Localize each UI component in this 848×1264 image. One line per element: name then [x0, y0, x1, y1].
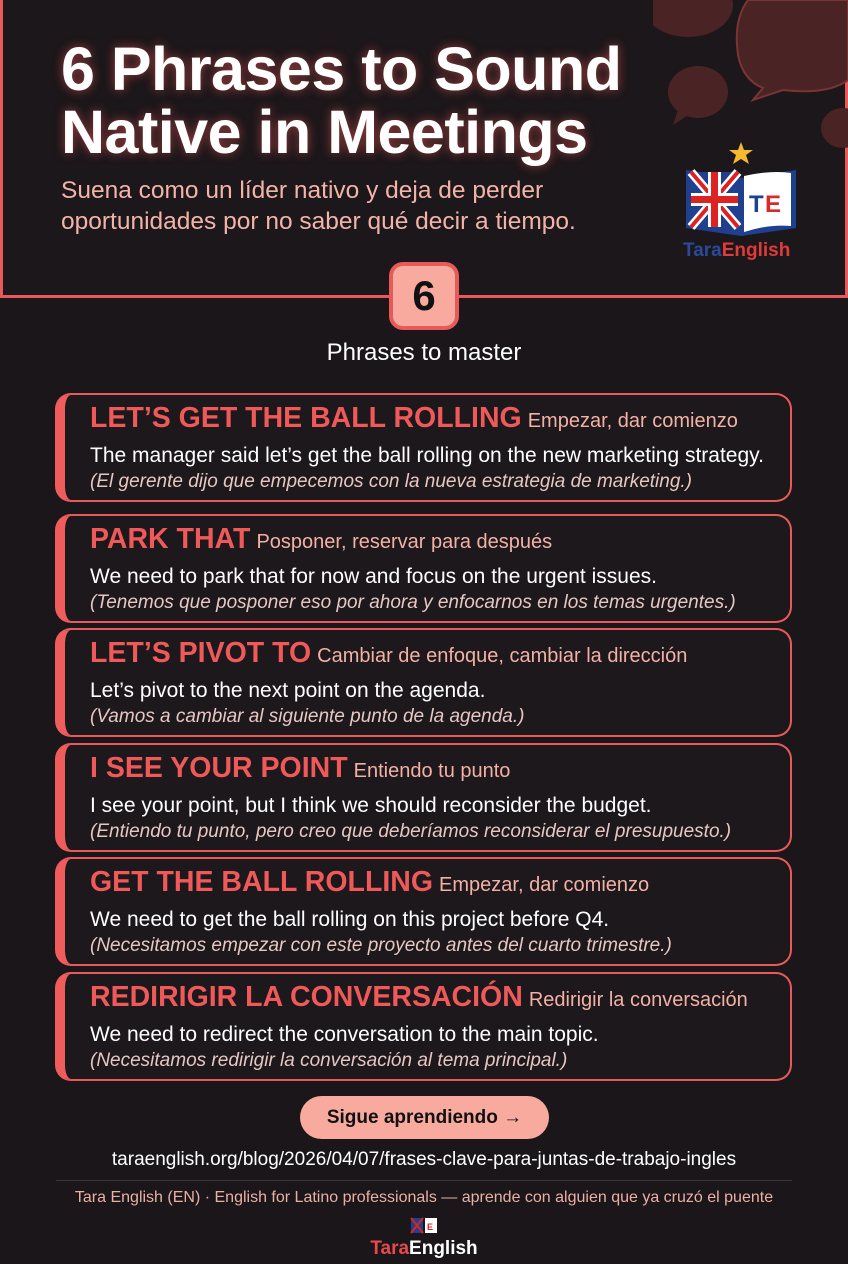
card 5: We need to get the ball rolling on this project before Q4. [90, 908, 609, 931]
card 5: (Necesitamos empezar con este proyecto antes del cuarto trimestre.) [90, 935, 672, 956]
card 6: (Necesitamos redirigir la conversación al tema principal.) [90, 1050, 567, 1071]
card 3: (Vamos a cambiar al siguiente punto de la agenda.) [90, 706, 524, 727]
card 4: I SEE YOUR POINT Entiendo tu punto [90, 752, 510, 784]
footer logo: E [427, 1222, 433, 1232]
logo: T [749, 191, 764, 218]
card 1: (El gerente dijo que empecemos con la nueva estrategia de marketing.) [90, 471, 692, 492]
subtitle [61, 177, 576, 235]
card 1: LET’S GET THE BALL ROLLING Empezar, dar comienzo [90, 402, 738, 434]
card 2: (Tenemos que posponer eso por ahora y enfocarnos en los temas urgentes.) [90, 592, 736, 613]
subtitle: oportunidades por no saber qué decir a tiempo. [61, 208, 576, 235]
cta button [300, 1096, 549, 1139]
card 2: PARK THAT Posponer, reservar para después [90, 523, 552, 555]
card 4 [55, 743, 792, 852]
badge: 6 [389, 262, 459, 330]
cta button: Sigue aprendiendo → [327, 1107, 522, 1128]
card 1: The manager said let’s get the ball rolling on the new marketing strategy. [90, 444, 764, 467]
card 5 [55, 857, 792, 966]
section heading: Phrases to master [327, 339, 521, 366]
logo [683, 142, 796, 261]
decorative chat bubbles [653, 0, 848, 148]
badge: 6: 6 [412, 272, 436, 319]
header panel [0, 0, 848, 298]
card 4: I see your point, but I think we should reconsider the budget. [90, 794, 652, 817]
card 3: Let’s pivot to the next point on the agenda. [90, 679, 485, 702]
card 6 [55, 972, 792, 1081]
card 2 [55, 514, 792, 623]
card 2: We need to park that for now and focus on the urgent issues. [90, 565, 657, 588]
card 3 [55, 628, 792, 737]
footer logo [370, 1217, 478, 1259]
card 5: GET THE BALL ROLLING Empezar, dar comienzo [90, 866, 649, 898]
card 1 [55, 393, 792, 502]
card 4: (Entiendo tu punto, pero creo que deberíamos reconsiderar el presupuesto.) [90, 821, 731, 842]
title: Native in Meetings [61, 98, 588, 166]
footer logo: TaraEnglish [370, 1238, 478, 1259]
card 3: LET’S PIVOT TO Cambiar de enfoque, cambiar la dirección [90, 637, 687, 669]
subtitle: Suena como un líder nativo y deja de perder [61, 177, 543, 204]
url: taraenglish.org/blog/2026/04/07/frases-clave-para-juntas-de-trabajo-ingles [112, 1149, 736, 1170]
title [56, 35, 625, 172]
title: 6 Phrases to Sound [61, 35, 621, 103]
card 6: We need to redirect the conversation to the main topic. [90, 1023, 599, 1046]
logo: TaraEnglish [683, 240, 790, 261]
footer tagline: Tara English (EN) · English for Latino professionals — aprende con alguien que ya cruzó el puente [75, 1189, 773, 1206]
card 6: REDIRIGIR LA CONVERSACIÓN Redirigir la conversación [90, 981, 748, 1013]
logo: E [765, 191, 781, 218]
